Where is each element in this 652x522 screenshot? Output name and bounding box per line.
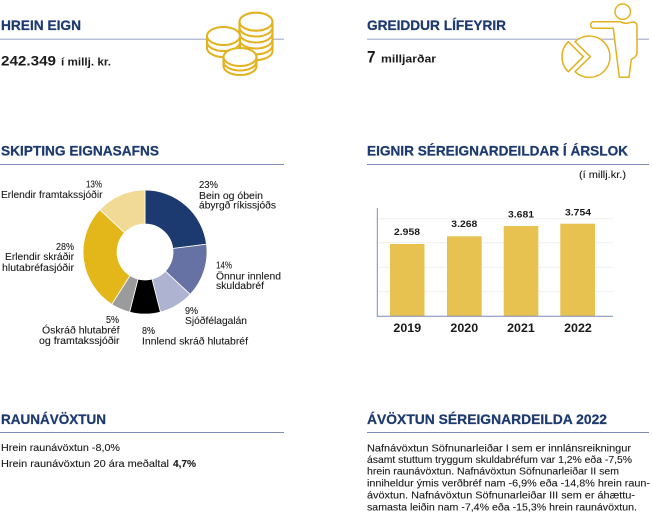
value: greiddur lífeyrir: 7 (367, 48, 376, 67)
label: 14% (216, 261, 281, 292)
heading: skipting eignasafns: SKIPTING EIGNASAFNS (1, 142, 159, 158)
panel: hrein eign (1, 13, 272, 75)
donut chart (83, 190, 207, 314)
heading: greiddur lífeyrir: GREIDDUR LÍFEYRIR (367, 17, 506, 33)
label: 23%: Bein og óbein (199, 191, 263, 202)
label: 23%: ábyrgð ríkissjóðs (199, 200, 276, 212)
year labels: 2022 (564, 323, 592, 335)
bar values: 3.681 (508, 210, 535, 221)
panel: skipting eignasafns (1, 142, 281, 348)
value: hrein eign: í millj. kr. (61, 56, 111, 68)
text block: ávöxtun séreignardeilda: ávöxtun. Nafnávöxtun Söfnunarleiðar III sem er áhættu- (367, 489, 635, 501)
text block: raunávöxtun (1, 443, 196, 470)
heading: raunávöxtun: RAUNÁVÖXTUN (1, 411, 106, 427)
year labels: 2021 (507, 323, 535, 335)
bar values: 3.754 (565, 208, 592, 218)
text block: raunávöxtun: Hrein raunávöxtun 20 ára meðaltal (1, 458, 169, 470)
label: 14%: skuldabréf (216, 281, 264, 292)
label: 13%: Erlendir framtakssjóðir (1, 189, 103, 201)
text block: ávöxtun séreignardeilda: hrein raunávöxtun. Nafnávöxtun Söfnunarleiðar II sem (367, 466, 619, 478)
label: 23%: 23% (199, 180, 218, 191)
value: greiddur lífeyrir (367, 48, 437, 67)
text block: raunávöxtun: 4,7% (173, 459, 196, 470)
label: 23% (199, 180, 276, 212)
panel: eignir séreignardeildar (367, 142, 628, 335)
panel: raunávöxtun (1, 411, 196, 470)
text block: ávöxtun séreignardeilda: inniheldur ýmis verðbréf nam -6,9% eða -14,8% hrein raun- (367, 477, 650, 489)
label: 28%: hlutabréfasjóðir (2, 262, 75, 274)
year labels: 2019 (393, 323, 421, 335)
label: 9%: 9% (185, 306, 198, 317)
label: 5%: Óskráð hlutabréf (42, 324, 120, 337)
label: 9%: Sjóðfélagalán (185, 315, 247, 327)
text block: ávöxtun séreignardeilda: ásamt stuttum tryggum skuldabréfum var 1,2% eða -7,5% (367, 454, 632, 466)
label: 28% (2, 242, 75, 274)
value: hrein eign (1, 53, 111, 68)
heading: ávöxtun séreignardeilda: ÁVÖXTUN SÉREIGNARDEILDA 2022 (367, 411, 607, 427)
value: greiddur lífeyrir: milljarðar (381, 54, 437, 66)
label: 9% (185, 306, 247, 327)
text block: ávöxtun séreignardeilda: Nafnávöxtun Söfnunarleiðar I sem er innlánsreikningur (367, 443, 632, 455)
label: 28%: 28% (56, 242, 74, 253)
icon: person with pie chart (562, 4, 637, 77)
text block: ávöxtun séreignardeilda: samasta leiðin nam -7,4% eða -15,3% hrein raunávöxtun. (367, 501, 637, 513)
value: hrein eign: 242.349 (1, 53, 56, 68)
bar values: 3.268 (451, 219, 477, 230)
label: 28%: Erlendir skráðir (5, 251, 75, 263)
label: 8% (142, 326, 248, 348)
bar chart (377, 208, 613, 335)
panel: greiddur lífeyrir (367, 4, 637, 77)
heading: eignir séreignardeildar: EIGNIR SÉREIGNARDEILDAR Í ÁRSLOK (367, 142, 628, 158)
label: 8%: 8% (142, 326, 155, 337)
label: 13%: 13% (86, 180, 102, 191)
year labels (393, 323, 592, 335)
bars (390, 224, 595, 316)
text block: ávöxtun séreignardeilda (367, 443, 650, 513)
bar values: 2.958 (394, 227, 420, 238)
panel: ávöxtun séreignardeilda (367, 411, 650, 513)
year labels: 2020 (450, 323, 478, 335)
label: 5%: og framtakssjóðir (39, 335, 120, 347)
bar values (394, 208, 592, 238)
label: 5%: 5% (106, 315, 119, 326)
text block: raunávöxtun: Hrein raunávöxtun -8,0% (1, 443, 120, 454)
label: 13% (1, 180, 103, 201)
label: 5% (39, 315, 120, 347)
unit note: (í millj.kr.) (579, 170, 626, 181)
label: 14%: Önnur innlend (216, 271, 281, 283)
label: 8%: Innlend skráð hlutabréf (142, 336, 248, 348)
label: 14%: 14% (216, 261, 232, 272)
icon: coins (207, 13, 272, 75)
heading: hrein eign: HREIN EIGN (1, 17, 81, 33)
